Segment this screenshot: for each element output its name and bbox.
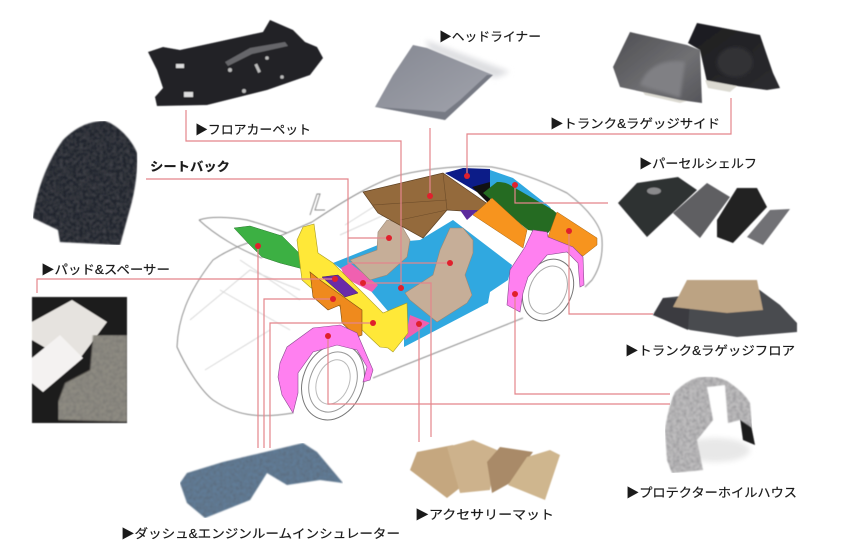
label: headliner: ▶ヘッドライナー xyxy=(439,30,541,44)
engine insulator orange xyxy=(310,272,362,337)
trunk side navy xyxy=(445,168,490,192)
purple pad xyxy=(322,275,358,297)
rear wheel house pink xyxy=(507,230,584,312)
label: accessory mat: ▶アクセサリーマット xyxy=(415,508,554,522)
parcel shelf green xyxy=(483,182,559,233)
car illustration xyxy=(177,166,602,429)
photo: accessory mats xyxy=(410,440,560,500)
photo: trunk and luggage floor xyxy=(653,280,797,337)
photo: protector wheel house xyxy=(665,377,755,473)
luggage floor orange xyxy=(473,198,597,256)
rear wheel xyxy=(513,251,583,329)
photo: parcel shelf xyxy=(618,177,790,245)
trunk side blue xyxy=(490,170,553,212)
front wheel house pink xyxy=(278,325,373,413)
trunk black xyxy=(472,182,490,205)
photo: floor carpet xyxy=(148,20,323,106)
small purple floor piece xyxy=(460,210,478,220)
leader lines xyxy=(37,98,731,448)
label: trunk and luggage side: ▶トランク&ラゲッジサイド xyxy=(550,117,720,131)
label: parcel shelf: ▶パーセルシェルフ xyxy=(639,157,757,171)
headliner brown xyxy=(363,173,492,238)
photo: pad and spacer xyxy=(32,297,127,423)
seats xyxy=(350,220,473,322)
photo: dash and engine room insulator xyxy=(180,443,343,518)
carpet floor xyxy=(333,220,512,347)
label: pad and spacer: ▶パッド&スペーサー xyxy=(41,263,170,277)
car body outline xyxy=(177,166,602,416)
label: dash and engine room insulator: ▶ダッシュ&エンジンルームインシュレーター xyxy=(121,526,400,541)
photo: headliner xyxy=(375,40,510,120)
label: seat back: シートバック xyxy=(150,160,230,174)
dash yellow xyxy=(297,224,408,352)
connection dots xyxy=(255,173,572,339)
label: trunk and luggage floor: ▶トランク&ラゲッジフロア xyxy=(625,344,795,358)
pink spacers xyxy=(341,263,378,292)
label: floor carpet: ▶フロアカーペット xyxy=(195,123,311,137)
photo: seat back xyxy=(33,121,137,245)
hood pad green xyxy=(234,226,317,270)
front wheel xyxy=(291,335,375,429)
photo: trunk and luggage side xyxy=(613,23,780,103)
label: protector wheel house: ▶プロテクターホイルハウス xyxy=(626,486,797,500)
